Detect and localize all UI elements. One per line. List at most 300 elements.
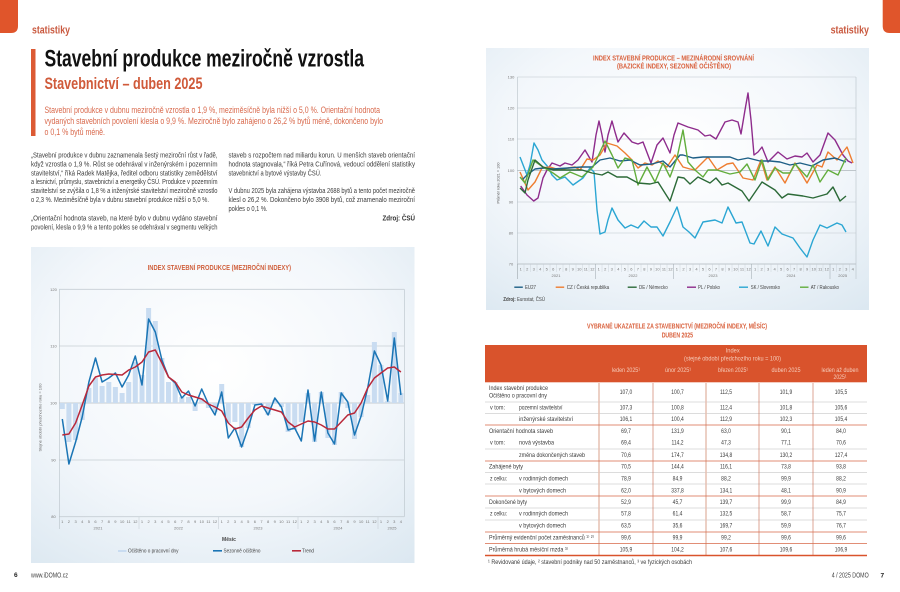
column: leden až duben 2025: 93,8	[836, 464, 846, 471]
x axis labels: 5	[702, 266, 705, 272]
x axis labels: 2	[227, 519, 230, 524]
x axis labels: 11	[286, 519, 291, 524]
article column 2: pokles o 0,1 %.	[228, 206, 268, 213]
row labels: Průměrná hrubá měsíční mzda ³⁾	[489, 546, 568, 553]
x axis labels: 3	[154, 519, 157, 524]
table footnote: ¹ Revidované údaje, ² stavební podniky nad 50 zaměstnanců, ³ ve fyzických osobách	[488, 559, 692, 566]
lead paragraph	[44, 105, 383, 137]
x axis labels: 4	[161, 519, 164, 524]
x axis labels: 2	[839, 266, 842, 272]
x axis labels: 4	[320, 519, 323, 524]
x axis labels: 8	[347, 519, 350, 524]
x axis labels: 5	[167, 519, 170, 524]
x axis labels: 9	[353, 519, 356, 524]
y axis gridlines and labels: 110	[508, 136, 515, 142]
row labels: v bytových domech	[519, 523, 566, 530]
x axis labels: 2	[604, 266, 607, 272]
x axis labels: 2	[68, 519, 71, 524]
row labels: z celku:	[490, 511, 507, 518]
column: únor 2025: 337,8	[671, 488, 684, 495]
legend: AT / Rakousko	[811, 285, 839, 291]
x axis labels: 9	[650, 266, 653, 272]
legend	[514, 284, 839, 291]
x axis labels: 12	[213, 519, 218, 524]
column: únor 2025: 144,4	[671, 464, 684, 471]
lead paragraph: o 0,1 % bytů méně.	[44, 127, 105, 137]
column: leden 2025: 107,3	[620, 405, 632, 412]
table header: březen 2025¹	[718, 367, 749, 374]
column: únor 2025: 45,7	[673, 500, 682, 506]
article column 1: a lesnictví, průmyslu, stavebnictví a energetiky ČSÚ. Produkce v pozemním	[31, 177, 218, 186]
column: leden 2025: 57,8	[621, 511, 631, 518]
table header: leden až duben	[822, 367, 859, 374]
column: leden až duben 2025: 105,4	[835, 417, 847, 423]
x axis labels: 12	[133, 519, 138, 524]
x axis labels: 2023	[254, 526, 263, 530]
column: leden až duben 2025: 84,9	[836, 500, 846, 506]
line: PL Poland	[521, 93, 852, 201]
x axis labels: 1	[221, 519, 224, 524]
column: duben 2025: 102,3	[780, 417, 792, 423]
x axis labels: 7	[559, 266, 562, 272]
x axis labels: 3	[313, 519, 316, 524]
column: leden 2025: 52,9	[621, 500, 631, 506]
column: duben 2025: 101,9	[780, 390, 792, 396]
column: březen 2025: 88,2	[721, 476, 731, 483]
x axis labels: 11	[206, 519, 211, 524]
column: březen 2025: 169,7	[720, 523, 732, 530]
column: duben 2025: 99,9	[781, 500, 791, 506]
x axis labels: 6	[333, 519, 336, 524]
x axis labels: 6	[552, 266, 555, 272]
x axis labels: 6	[708, 266, 711, 272]
x axis labels: 3	[393, 519, 396, 524]
table grid	[485, 383, 867, 556]
x axis labels: 12	[668, 266, 673, 272]
x axis labels: 2	[307, 519, 310, 524]
row labels: Očištěno o pracovní dny	[489, 392, 548, 400]
x axis labels: 2	[387, 519, 390, 524]
x axis labels: 1	[61, 519, 64, 524]
x axis labels: 9	[114, 519, 117, 524]
table title	[587, 321, 767, 340]
row labels	[489, 385, 594, 553]
x axis labels: 2023	[709, 273, 718, 278]
x axis labels: 11	[740, 266, 745, 272]
x axis labels: 3	[767, 266, 770, 272]
y axis gridlines and labels: Stejné období předchozího roku = 100	[38, 383, 42, 451]
column: únor 2025: 61,4	[673, 511, 682, 518]
column: duben 2025: 90,1	[781, 429, 791, 435]
x axis labels: 12	[590, 266, 595, 272]
column: leden až duben 2025: 105,6	[835, 405, 847, 412]
column: únor 2025: 104,2	[671, 547, 684, 554]
article column 2: staveb s rozpočtem nad miliardu korun. U menších staveb orientační	[228, 152, 415, 159]
column: duben 2025: 77,1	[781, 440, 791, 447]
column: březen 2025: 139,7	[720, 500, 732, 506]
x axis labels: 9	[806, 266, 809, 272]
column: březen 2025: 134,8	[720, 453, 732, 459]
row labels: pozemní stavitelství	[519, 404, 563, 412]
x axis labels: 2	[682, 266, 685, 272]
column: leden až duben 2025: 99,6	[836, 535, 846, 542]
article column 1: povolení, klesla o 9,9 % a tento pokles se odehrával v segmentu velkých	[31, 224, 218, 231]
x axis labels: 2025	[388, 526, 397, 530]
table title: VYBRANÉ UKAZATELE ZA STAVEBNICTVÍ (MEZIROČNÍ INDEXY, MĚSÍC)	[587, 321, 767, 330]
chart source: Zdroj: Eurostat, ČSÚ	[503, 296, 545, 303]
x axis labels: 12	[746, 266, 752, 272]
legend: Očištěno o pracovní dny	[128, 549, 179, 555]
section label left: statistiky	[32, 24, 71, 36]
column: březen 2025: 132,5	[720, 511, 732, 518]
x axis labels: 5	[546, 266, 549, 272]
chart title: (BAZICKÉ INDEXY, SEZONNĚ OČIŠTĚNO)	[617, 62, 731, 70]
x axis labels: 10	[279, 519, 284, 524]
legend: DE / Německo	[639, 285, 668, 291]
x axis labels: 12	[292, 519, 298, 524]
line: SK Slovakia	[520, 143, 846, 257]
x axis labels: 1	[141, 519, 144, 524]
article column 2	[228, 152, 415, 222]
legend: EU27	[525, 285, 536, 291]
footer right: 7	[880, 572, 884, 580]
x axis labels: 1	[520, 266, 523, 272]
table header: leden 2025¹	[612, 367, 641, 374]
x axis labels: 11	[662, 266, 667, 272]
x axis labels: 9	[728, 266, 731, 272]
x axis labels: 7	[637, 266, 640, 272]
x axis labels: 8	[799, 266, 802, 272]
x axis labels: 11	[818, 266, 823, 272]
column: duben 2025: 99,6	[781, 535, 791, 542]
row labels: Zahájené byty	[489, 464, 524, 471]
article column 1: stavitelství se zvýšila o 1,8 % a inženýrské stavitelství meziročně vzrostlo	[31, 188, 218, 195]
column: leden až duben 2025: 127,4	[835, 453, 847, 459]
accent bar	[31, 49, 36, 136]
line: DE Germany	[520, 160, 846, 201]
row labels: Dokončené byty	[489, 499, 528, 506]
x axis labels: 1	[832, 266, 835, 272]
x axis labels: 5	[88, 519, 91, 524]
x axis labels: 2022	[629, 273, 638, 278]
x axis labels	[61, 517, 403, 530]
right page tab	[883, 0, 900, 33]
x axis labels	[517, 264, 855, 279]
row labels: změna dokončených staveb	[519, 452, 585, 459]
table title: DUBEN 2025	[662, 330, 693, 340]
x axis labels: 6	[174, 519, 177, 524]
article column 1: o 2,3 %. Meziměsíčně byla v dubnu stavební produkce nižší o 5,0 %.	[31, 197, 209, 204]
column: leden 2025: 70,5	[621, 464, 631, 471]
line: AT Austria	[520, 130, 846, 185]
article column 2: V dubnu 2025 byla zahájena výstavba 2688 bytů a tento počet meziročně	[228, 187, 415, 195]
column: únor 2025: 84,9	[673, 476, 682, 483]
column: březen 2025: 112,9	[720, 417, 732, 423]
x axis labels: 1	[598, 266, 601, 272]
x axis labels: 10	[359, 519, 364, 524]
row labels: z celku:	[490, 476, 507, 483]
y axis gridlines and labels: 100	[508, 168, 515, 173]
column: leden 2025: 63,5	[621, 523, 631, 530]
x axis labels: 2025	[838, 273, 848, 278]
x axis labels: 7	[715, 266, 718, 272]
panel: production index chart	[31, 247, 414, 563]
x axis labels: 7	[101, 519, 104, 524]
chart title: INDEX STAVEBNÍ PRODUKCE – MEZINÁRODNÍ SROVNÁNÍ	[593, 54, 755, 63]
table header: duben 2025	[772, 367, 801, 374]
column: duben 2025: 109,6	[780, 547, 792, 554]
article column 1: když vzrostla o 1,9 %. Růst se odehrával v inženýrském i pozemním	[31, 160, 218, 168]
x axis labels: 7	[793, 266, 796, 272]
table header: Index	[726, 348, 740, 354]
column: leden až duben 2025: 75,7	[836, 511, 846, 518]
x axis labels: 3	[533, 266, 536, 272]
chart title: INDEX STAVEBNÍ PRODUKCE (MEZIROČNÍ INDEXY)	[148, 263, 291, 272]
row labels: v tom:	[490, 404, 505, 412]
x axis labels: 2024	[334, 526, 343, 530]
column: únor 2025: 131,9	[671, 429, 684, 435]
column: leden 2025	[620, 390, 632, 554]
panel: international comparison chart	[486, 48, 869, 310]
x axis labels: 1	[380, 519, 383, 524]
x axis labels: 10	[199, 519, 205, 524]
chart title	[593, 54, 755, 70]
column: březen 2025	[720, 390, 732, 554]
axis title: Měsíc	[222, 537, 236, 543]
x axis labels: 6	[786, 266, 789, 272]
column: únor 2025: 99,9	[673, 535, 682, 542]
table header: 2025¹	[834, 374, 847, 381]
x axis labels: 6	[630, 266, 633, 272]
x axis labels: 2021	[94, 526, 103, 530]
x axis labels: 4	[539, 266, 542, 272]
table: selected construction indicators	[485, 345, 867, 556]
column: únor 2025	[671, 390, 684, 554]
column: březen 2025: 47,3	[721, 440, 731, 447]
x axis labels: 1	[300, 519, 303, 524]
column: březen 2025: 112,4	[720, 405, 732, 412]
article column 2: stavebnictví a bytové výstavby ČSÚ.	[228, 168, 322, 177]
y axis gridlines and labels	[38, 287, 404, 529]
x axis labels: 6	[254, 519, 257, 524]
column: leden 2025: 78,9	[621, 476, 631, 483]
y axis gridlines and labels: 90	[51, 458, 56, 462]
x axis labels: 2	[526, 266, 529, 272]
line: EU27	[522, 155, 846, 180]
column: únor 2025: 114,2	[671, 440, 684, 447]
footer left: www.iDOMO.cz	[30, 572, 68, 580]
x axis labels: 4	[400, 519, 403, 524]
row labels: v rodinných domech	[519, 511, 568, 518]
column: leden až duben 2025: 76,7	[836, 523, 846, 530]
column: leden 2025: 99,6	[621, 535, 631, 542]
x axis labels: 9	[572, 266, 575, 272]
x axis labels: 8	[721, 266, 724, 272]
x axis labels: 8	[267, 519, 270, 524]
x axis labels: 7	[340, 519, 343, 524]
column: leden 2025: 69,4	[621, 440, 631, 447]
x axis labels: 5	[247, 519, 250, 524]
bars: adjusted for working days	[62, 308, 401, 447]
y axis gridlines and labels: 80	[509, 230, 514, 236]
column: únor 2025: 35,6	[673, 523, 682, 530]
x axis labels: 2	[147, 519, 150, 524]
legend: PL / Polsko	[698, 285, 720, 291]
x axis labels: 1	[676, 266, 679, 272]
column: leden až duben 2025: 106,9	[835, 547, 847, 554]
y axis gridlines and labels: 120	[50, 287, 58, 292]
footer left	[14, 572, 68, 580]
x axis labels: 7	[181, 519, 184, 524]
column: duben 2025: 59,9	[781, 523, 791, 530]
row labels: v rodinných domech	[519, 476, 568, 483]
column: leden 2025: 106,1	[620, 417, 632, 423]
x axis labels: 9	[274, 519, 277, 524]
column: leden až duben 2025: 105,5	[835, 390, 847, 396]
y axis gridlines and labels: 110	[50, 344, 57, 348]
x axis labels: 4	[81, 519, 84, 524]
x axis labels: 10	[733, 266, 738, 272]
column: duben 2025: 73,8	[781, 464, 791, 471]
column: březen 2025: 134,1	[720, 488, 732, 495]
x axis labels: 11	[127, 519, 132, 524]
row labels: Průměrný evidenční počet zaměstnanců ¹⁾ ²⁾	[489, 534, 594, 542]
column: leden 2025: 105,9	[620, 547, 632, 554]
x axis labels: 9	[194, 519, 197, 524]
x axis labels: 4	[695, 266, 698, 272]
line: CZ Czechia	[520, 143, 853, 190]
left page tab	[0, 0, 18, 33]
x axis labels: 4	[773, 266, 776, 272]
x axis labels: 8	[108, 519, 111, 524]
x axis labels: 5	[780, 266, 783, 272]
column: únor 2025: 174,7	[671, 453, 684, 459]
x axis labels: 7	[260, 519, 263, 524]
x axis labels: 11	[366, 519, 371, 524]
column: březen 2025: 107,6	[720, 547, 732, 554]
x axis labels: 12	[372, 519, 377, 524]
x axis labels: 8	[565, 266, 568, 272]
x axis labels: 4	[240, 519, 243, 524]
row labels: Index stavební produkce	[489, 385, 548, 392]
subtitle: Stavebnictví – duben 2025	[44, 75, 202, 93]
x axis labels: 4	[617, 266, 620, 272]
y axis gridlines and labels: Průměr roku 2021 = 100	[496, 162, 500, 204]
footer right: 4 / 2025 DOMO	[832, 572, 869, 580]
column: leden až duben 2025: 70,6	[836, 440, 846, 447]
article column 2: klesl o 26,2 %. Dokončeno bylo 3908 bytů, což znamenalo meziroční	[228, 196, 415, 204]
x axis labels: 3	[611, 266, 614, 272]
column: leden 2025: 107,0	[620, 390, 632, 396]
x axis labels: 1	[754, 266, 757, 272]
article column 2: Zdroj: ČSÚ	[382, 213, 415, 222]
x axis labels: 10	[577, 266, 582, 272]
x axis labels: 3	[234, 519, 237, 524]
column: únor 2025: 100,7	[671, 390, 684, 396]
column: leden až duben 2025: 84,0	[836, 429, 846, 435]
article column 1	[31, 151, 218, 231]
x axis labels: 5	[624, 266, 627, 272]
x axis labels: 2021	[552, 273, 561, 278]
y axis gridlines and labels: 80	[51, 514, 56, 519]
article column 1: „Orientační hodnota staveb, na které bylo v dubnu vydáno stavební	[31, 215, 218, 222]
x axis labels: 5	[327, 519, 330, 524]
x axis labels: 2	[760, 266, 763, 272]
legend	[118, 549, 314, 555]
line: trend	[62, 350, 401, 435]
y axis gridlines and labels: 130	[508, 74, 515, 80]
column: leden až duben 2025: 90,9	[836, 488, 846, 495]
column: leden až duben 2025: 88,2	[836, 476, 846, 483]
legend: Sezonně očištěno	[224, 549, 260, 555]
column: duben 2025: 58,7	[781, 511, 791, 518]
x axis labels: 3	[845, 266, 848, 272]
y axis gridlines and labels: 100	[50, 400, 58, 406]
lead paragraph: vydaných stavebních povolení klesla o 9,9 %. Meziročně bylo zahájeno o 26,2 % bytů méně, dokončeno bylo	[44, 116, 383, 126]
x axis labels: 12	[824, 266, 830, 272]
x axis labels: 4	[852, 266, 855, 272]
table header: (stejné období předchozího roku = 100)	[684, 356, 781, 362]
y axis gridlines and labels	[496, 74, 856, 279]
column: březen 2025: 112,5	[720, 390, 732, 396]
column: duben 2025: 99,9	[781, 476, 791, 483]
column: duben 2025	[780, 390, 792, 554]
x axis labels: 3	[74, 519, 77, 524]
row labels: v tom:	[490, 439, 505, 446]
column: leden 2025: 62,0	[621, 488, 631, 495]
legend: Trend	[302, 549, 314, 555]
x axis labels: 2024	[787, 273, 796, 278]
x axis labels: 6	[94, 519, 97, 524]
column: duben 2025: 101,8	[780, 405, 792, 412]
footer left: 6	[14, 572, 18, 579]
row labels: v bytových domech	[519, 488, 566, 495]
article column 2: hodnota stagnovala,“ říká Petra Cuřínová, vedoucí oddělení statistiky	[228, 161, 415, 168]
column: duben 2025: 130,2	[780, 453, 792, 459]
x axis labels: 3	[689, 266, 692, 272]
x axis labels: 11	[584, 266, 589, 272]
row labels: Orientační hodnota staveb	[489, 428, 553, 435]
column: leden 2025: 70,6	[621, 453, 631, 459]
column: březen 2025: 99,2	[721, 535, 731, 542]
column: únor 2025: 100,4	[671, 417, 684, 423]
x axis labels: 10	[811, 266, 817, 272]
x axis labels: 2022	[174, 526, 184, 530]
article column 1: stavitelství,“ říká Radek Matějka, ředitel odboru statistiky zemědělství	[31, 170, 218, 177]
column: březen 2025: 116,1	[720, 464, 732, 471]
x axis labels: 10	[655, 266, 660, 272]
table header	[485, 345, 867, 382]
x axis labels: 8	[187, 519, 190, 524]
x axis labels: 10	[120, 519, 125, 524]
section label right: statistiky	[831, 24, 870, 36]
line: seasonally adjusted	[62, 319, 401, 464]
y axis gridlines and labels: 70	[509, 262, 514, 266]
y axis gridlines and labels: 120	[508, 106, 515, 110]
column: březen 2025: 63,0	[721, 429, 731, 435]
column: leden až duben 2025	[835, 390, 847, 554]
row labels: inženýrské stavitelství	[519, 416, 573, 423]
column: leden 2025: 69,7	[621, 429, 631, 435]
table header: únor 2025¹	[665, 367, 692, 374]
column: duben 2025: 48,1	[781, 488, 791, 495]
column: únor 2025: 100,8	[671, 405, 684, 412]
article column 1: „Stavební produkce v dubnu zaznamenala šestý meziroční růst v řadě,	[31, 151, 218, 159]
title: Stavební produkce meziročně vzrostla	[44, 46, 364, 72]
legend: CZ / Česká republika	[567, 284, 610, 291]
y axis gridlines and labels: 90	[509, 200, 514, 204]
legend: SK / Slovensko	[751, 285, 780, 291]
